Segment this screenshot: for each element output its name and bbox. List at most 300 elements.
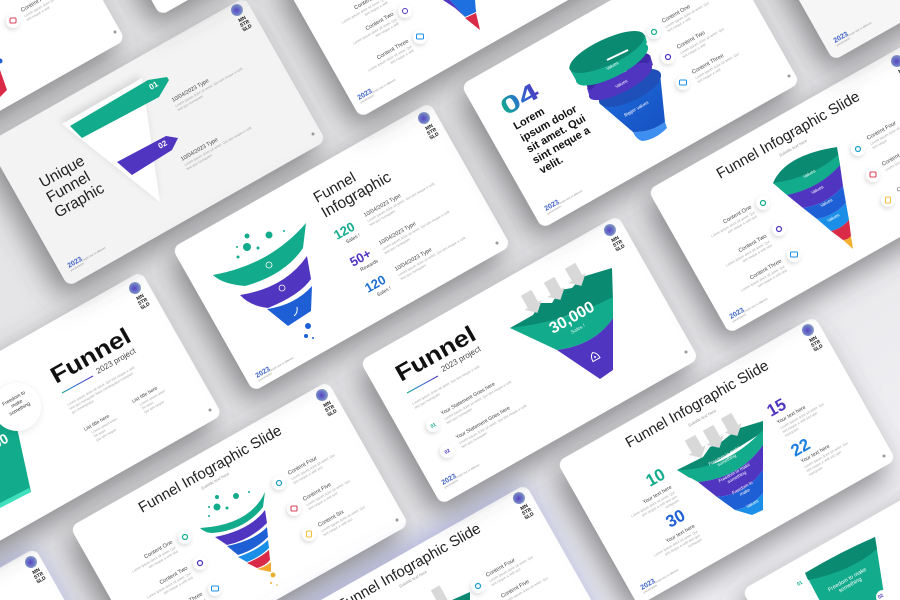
content three: Lorem ipsum dolor sit amet. Qui bbox=[694, 52, 740, 80]
year footer bbox=[729, 294, 770, 323]
type text 1: 10/04/2023 Type bbox=[363, 193, 402, 219]
type text 1: sed quo numquam bbox=[369, 209, 396, 227]
content three text: Content Three bbox=[376, 39, 410, 61]
stat 50+ bbox=[347, 244, 380, 276]
logo: SLD bbox=[327, 408, 339, 418]
statement one: Your Statement Goes here bbox=[440, 381, 496, 417]
teal funnel: Freedom to make bbox=[827, 567, 868, 593]
bold statement: velit. bbox=[538, 154, 565, 177]
stat 50+: Rewards bbox=[359, 258, 380, 273]
type text 2: sed quo numquam bbox=[186, 153, 213, 171]
content two bbox=[722, 222, 786, 271]
logo: SLD bbox=[615, 243, 627, 253]
year footer: 2023 bbox=[729, 307, 746, 321]
panel: top centre slide bbox=[279, 0, 618, 118]
logo: STR bbox=[137, 297, 149, 307]
content two: sint neque a velit sed bbox=[163, 576, 194, 595]
teal funnel bbox=[805, 537, 888, 600]
3D funnel: purple ring bbox=[582, 46, 657, 107]
content three: Content Three bbox=[691, 53, 725, 76]
logo: MN bbox=[520, 503, 530, 512]
logo: STR bbox=[810, 339, 822, 349]
year footer: presentation bbox=[546, 204, 562, 215]
label 01: 01 bbox=[796, 580, 804, 588]
list two bbox=[131, 382, 171, 417]
bold statement: ipsum dolor bbox=[519, 103, 580, 145]
content four: sint neque a velit sed bbox=[491, 567, 521, 587]
logo bbox=[800, 322, 825, 354]
type text 2: sed quo numquam bbox=[384, 237, 411, 255]
page number dot bbox=[312, 132, 314, 136]
heading Funnel: Funnel bbox=[391, 320, 480, 386]
content one: Lorem ipsum dolor sit amet. Qui bbox=[131, 546, 177, 574]
stat 120 teal: 120 bbox=[331, 219, 357, 243]
list two: Qui sint neque bbox=[143, 400, 165, 414]
content one bbox=[647, 0, 712, 39]
subtitle: Subtitle text here bbox=[200, 471, 230, 491]
year footer: presentation bbox=[642, 583, 658, 594]
logo bbox=[23, 554, 48, 586]
logo: MN bbox=[32, 567, 42, 576]
funnel fragment bbox=[443, 0, 480, 30]
stat 10: numquam bbox=[664, 498, 680, 510]
page number dot bbox=[788, 74, 790, 78]
slide card bbox=[70, 381, 409, 600]
content three bbox=[737, 248, 801, 296]
content three bbox=[676, 46, 742, 90]
white triangle bbox=[62, 78, 160, 202]
logo: SLD bbox=[242, 23, 254, 33]
content six: Lorem ipsum dolor sit amet. Qui bbox=[320, 505, 366, 533]
stat 15: 15 bbox=[764, 395, 789, 420]
gradient rule bbox=[62, 376, 93, 393]
slide card bbox=[557, 316, 896, 600]
logo: STR bbox=[239, 19, 251, 29]
3D funnel: teal ring bbox=[564, 23, 654, 94]
funnel fragment bbox=[452, 592, 470, 600]
year footer: 2023 bbox=[441, 473, 458, 487]
stat 120 teal: Sales ! bbox=[345, 233, 361, 245]
logo bbox=[229, 2, 254, 34]
bold statement: sit amet. Qui bbox=[525, 113, 588, 156]
year footer: Simple text to different bbox=[557, 189, 584, 206]
list two: Sit amet bbox=[141, 401, 154, 411]
funnel chart: Freedom to make bbox=[718, 462, 751, 484]
slide card bbox=[461, 0, 800, 229]
funnel chart: something bbox=[716, 453, 737, 467]
content five: sint neque a velit sed bbox=[308, 491, 338, 511]
funnel chart: 30,000 bbox=[547, 299, 598, 337]
year footer bbox=[441, 460, 482, 489]
stat 120 teal bbox=[331, 219, 361, 249]
content four: Content Four bbox=[485, 557, 517, 579]
list one: Qui sint neque bbox=[95, 428, 117, 442]
title: Funnel Infographic Slide bbox=[136, 422, 285, 516]
logo: MN bbox=[611, 235, 621, 244]
logo: MN bbox=[323, 400, 333, 409]
statement two: sed quo numquam bbox=[461, 431, 488, 449]
content one bbox=[707, 196, 770, 242]
panel: unique funnel graphic slide bbox=[0, 0, 326, 287]
content two: Lorem ipsum dolor sit amet. Qui bbox=[725, 240, 771, 268]
content two: sint neque a velit bbox=[682, 43, 707, 59]
statement one: 01 bbox=[430, 422, 438, 430]
page number dot bbox=[114, 30, 116, 34]
year footer: Simple text to different bbox=[846, 21, 873, 38]
heading: Infographic bbox=[319, 169, 394, 221]
content four: Content Four bbox=[287, 455, 319, 477]
content three: sint neque a velit sed bbox=[757, 269, 788, 288]
content four: Lorem ipsum dolor sit amet. Qui bbox=[488, 555, 534, 583]
3D funnel: blue cup: Bigger values bbox=[623, 99, 650, 118]
logo: SLD bbox=[36, 575, 48, 585]
purple arrow band 02: 02 bbox=[157, 138, 169, 151]
statement one: Lorem ipsum dolor sit amet. Qui sint neque a velit bbox=[443, 380, 512, 421]
slide card bbox=[0, 0, 326, 287]
gradient rule bbox=[407, 376, 438, 393]
year footer bbox=[640, 565, 681, 594]
content one: sint neque a velit sed bbox=[727, 215, 758, 234]
heading: Graphic bbox=[52, 180, 107, 221]
label 02 bbox=[876, 590, 890, 600]
layered 3D funnel: Values bbox=[810, 184, 825, 195]
content four: sint neque bbox=[872, 139, 888, 150]
stat 120 blue bbox=[362, 272, 392, 302]
logo: MN bbox=[425, 123, 435, 132]
stat 30 bbox=[650, 506, 703, 565]
slide card bbox=[648, 44, 900, 334]
content four bbox=[471, 549, 536, 593]
teal arrow band 01 bbox=[70, 77, 169, 138]
slide card bbox=[742, 444, 900, 600]
content three text: Lorem ipsum dolor sit amet. Qui bbox=[367, 45, 413, 73]
stat 15: Lorem ipsum dolor sit amet. Qui bbox=[779, 402, 825, 430]
content three text: sint neque a velit bbox=[390, 49, 415, 65]
icon: gear bbox=[398, 4, 412, 18]
content two: Lorem ipsum dolor sit amet. Qui bbox=[146, 572, 192, 600]
icon: laptop bbox=[413, 30, 427, 44]
panel: bottom-left slide bbox=[0, 548, 116, 600]
paragraph: qui consequatur bbox=[71, 399, 95, 415]
panel: top slide fragment bbox=[79, 0, 418, 16]
subtitle: Subtitle text here bbox=[687, 408, 717, 428]
stat 30: numquam bbox=[687, 537, 703, 549]
stat 10 bbox=[627, 465, 680, 526]
content two bbox=[143, 556, 207, 600]
gray arrow bbox=[431, 585, 453, 600]
panel: 04 slide bbox=[461, 0, 800, 229]
subheading: 2023 project bbox=[95, 346, 138, 376]
page number dot bbox=[684, 350, 688, 354]
content four: sint neque a velit sed bbox=[293, 465, 323, 485]
subtitle: Subtitle text here bbox=[778, 138, 808, 158]
content four: Lorem ipsum dolor sit amet. Qui bbox=[290, 453, 336, 481]
year footer: 2023 bbox=[833, 31, 850, 45]
type text 2: 10/04/2023 Type bbox=[378, 221, 417, 247]
year footer: Simple text to different bbox=[268, 356, 295, 373]
content two bbox=[661, 21, 727, 64]
statement two: Your Statement Goes here bbox=[455, 405, 511, 441]
type text 3: 10/04/2023 Type bbox=[394, 247, 433, 273]
year footer: presentation bbox=[731, 312, 747, 323]
arrows into funnel bbox=[681, 411, 746, 463]
content two: sint neque a velit sed bbox=[742, 244, 773, 263]
stat 22: numquam bbox=[808, 466, 823, 477]
slide card bbox=[360, 215, 699, 505]
logo: MN bbox=[238, 15, 248, 24]
year footer: presentation bbox=[359, 93, 375, 104]
panel: funnel 30,000 slide bbox=[360, 215, 699, 505]
subtitle: Subtitle text here bbox=[398, 569, 428, 589]
stat 22: sint neque a velit sed quo bbox=[806, 450, 842, 473]
logo: SLD bbox=[813, 343, 825, 353]
type text 1: sed quo numquam bbox=[177, 94, 204, 112]
type text 2: Lorem ipsum dolor sit amet. Qui sint neque a velit bbox=[183, 126, 252, 167]
paragraph: Lorem ipsum dolor sit amet. Qui sint neque a velit bbox=[412, 365, 480, 406]
content two text: sint neque a velit bbox=[375, 22, 400, 38]
statement two: 02 bbox=[444, 448, 452, 456]
stat 22: Your text here bbox=[800, 444, 831, 465]
year footer: 2023 bbox=[357, 88, 374, 102]
logo: STR bbox=[33, 571, 45, 581]
logo bbox=[602, 222, 627, 254]
bold statement bbox=[512, 103, 593, 177]
stat 30: Lorem ipsum dolor sit amet. Qui bbox=[653, 530, 699, 558]
subheading: 2023 project bbox=[440, 344, 483, 374]
3D funnel: purple ring: Values bbox=[614, 78, 629, 89]
year footer bbox=[833, 18, 874, 47]
funnel chart: Freedom to make bbox=[708, 445, 741, 467]
stat 22 bbox=[788, 435, 853, 477]
content four bbox=[851, 120, 900, 156]
stat 10: 10 bbox=[643, 465, 668, 490]
teal arrow band 01: 01 bbox=[148, 79, 160, 92]
type text 1: Lorem ipsum dolor sit amet. Qui sint neque a velit bbox=[174, 67, 243, 108]
list one bbox=[83, 410, 123, 445]
panel: funnel infographic slide bottom centre bbox=[268, 484, 607, 600]
content two: Content Two bbox=[676, 30, 706, 51]
year footer: presentation bbox=[69, 261, 85, 272]
panel: top-left slide bbox=[0, 0, 125, 186]
year footer: presentation bbox=[443, 478, 459, 489]
logo: SLD bbox=[429, 131, 441, 141]
stat 22: 22 bbox=[788, 435, 813, 460]
year footer bbox=[357, 75, 398, 104]
layered 3D funnel: Values bbox=[819, 197, 834, 208]
statement one: sed quo numquam bbox=[446, 407, 473, 425]
title: Funnel Infographic Slide bbox=[714, 88, 863, 182]
list two: Lorem ipsum dolor bbox=[139, 388, 167, 407]
content four bbox=[272, 447, 338, 490]
stat 10: Your text here bbox=[642, 484, 673, 506]
speech bubble bbox=[0, 383, 41, 431]
stat 10: Lorem ipsum dolor sit amet. Qui bbox=[630, 491, 676, 519]
logo: STR bbox=[426, 127, 438, 137]
panel: funnel infographic slide bottom bbox=[70, 381, 409, 600]
stat 15: Your text here bbox=[776, 405, 807, 426]
stat 30: sint neque a velit sed quo bbox=[664, 534, 701, 557]
stat 10: sint neque a velit sed quo bbox=[641, 495, 678, 518]
list one: Lorem ipsum dolor bbox=[91, 416, 119, 435]
page number dot bbox=[496, 242, 498, 244]
year footer: presentation bbox=[257, 371, 273, 382]
icon: monitor bbox=[6, 14, 20, 28]
title: Funnel Infographic Slide bbox=[623, 357, 772, 451]
year footer: presentation bbox=[835, 36, 851, 47]
3D funnel: blue cup bbox=[594, 61, 667, 141]
heading: Funnel bbox=[44, 168, 93, 206]
year footer: Simple text to different bbox=[742, 297, 769, 314]
content one: Lorem ipsum dolor sit amet. Qui bbox=[664, 1, 710, 29]
content five: Content Five bbox=[302, 482, 333, 503]
layered 3D funnel: Values bbox=[826, 212, 841, 223]
big number 04: 04 bbox=[496, 78, 545, 121]
funnel chart: Sales ! bbox=[570, 323, 586, 336]
content four: Content Four bbox=[866, 120, 898, 142]
content two text: Lorem ipsum dolor sit amet. Qui bbox=[352, 18, 398, 46]
logo bbox=[314, 387, 339, 419]
paragraph: sed quo numquam Nam consequatur excepturi bbox=[69, 371, 134, 411]
arrows into funnel bbox=[517, 261, 590, 318]
year footer: 2023 bbox=[640, 578, 657, 592]
stat 120 blue: Sales ! bbox=[376, 286, 392, 298]
teal bubbles bbox=[208, 491, 250, 517]
funnel chart bbox=[510, 268, 613, 379]
purple arrow band 02 bbox=[117, 136, 178, 175]
year footer: Simple text to different bbox=[454, 463, 481, 480]
3D funnel: teal ring: Values bbox=[605, 60, 620, 71]
slide card bbox=[0, 0, 125, 186]
logo: STR bbox=[324, 404, 336, 414]
logo: STR bbox=[612, 239, 624, 249]
type text 1: 10/04/2023 Type bbox=[171, 78, 210, 104]
heading bbox=[37, 152, 107, 221]
stat 30: Your text here bbox=[665, 523, 696, 545]
content four text: sint neque a velit bbox=[26, 6, 51, 22]
page number dot bbox=[396, 518, 398, 522]
year footer: Simple text to different bbox=[653, 568, 680, 585]
content five: Lorem ipsum dolor sit amet. Qui bbox=[305, 479, 351, 507]
year footer: 2023 bbox=[544, 199, 561, 213]
teal funnel: something bbox=[838, 576, 863, 594]
statement one bbox=[426, 374, 515, 432]
year footer: 2023 bbox=[255, 366, 272, 380]
speech bubble: Freedom to bbox=[1, 390, 27, 408]
stat 15: numquam bbox=[784, 427, 799, 438]
type text 2: Lorem ipsum dolor sit amet. Qui sint neque a velit bbox=[381, 210, 450, 251]
logo: SLD bbox=[140, 301, 152, 311]
panel: top-right slide bbox=[752, 0, 900, 61]
stat 15 bbox=[764, 395, 829, 438]
content six: Content Six bbox=[317, 509, 345, 529]
content five: Content Five bbox=[500, 579, 531, 600]
content two: Content Two bbox=[159, 566, 189, 586]
heading: Unique bbox=[37, 152, 88, 191]
slide card bbox=[0, 271, 222, 561]
bold statement: Lorem bbox=[512, 106, 547, 133]
logo: MN bbox=[809, 335, 819, 344]
content one text: sint neque a velit bbox=[364, 1, 389, 17]
heading: Funnel bbox=[311, 169, 359, 206]
teal funnel fragment bbox=[0, 423, 31, 508]
stat 120 blue: 120 bbox=[362, 272, 388, 296]
content five bbox=[866, 147, 900, 182]
content six bbox=[302, 499, 368, 541]
content six: sint neque a velit sed bbox=[323, 517, 353, 537]
statement two: Lorem ipsum dolor sit amet. Qui sint neque a velit bbox=[458, 404, 527, 445]
year footer bbox=[67, 243, 108, 272]
content three text bbox=[364, 38, 415, 76]
funnel chart bbox=[213, 223, 312, 326]
content three: sint neque a velit bbox=[697, 68, 722, 84]
content one bbox=[128, 530, 192, 577]
year footer: 2023 bbox=[67, 256, 84, 270]
slide card bbox=[79, 0, 418, 16]
slide card bbox=[752, 0, 900, 61]
teal bubbles bbox=[236, 230, 285, 258]
logo: MN bbox=[136, 293, 146, 302]
content one: Content One bbox=[722, 205, 753, 225]
panel: funnel infographic slide lower right bbox=[557, 316, 896, 600]
paragraph: sed quo numquam bbox=[414, 392, 441, 410]
page number dot bbox=[882, 454, 886, 458]
speech bubble: something bbox=[8, 401, 32, 418]
logo bbox=[511, 490, 536, 522]
bold statement: sint neque a bbox=[531, 124, 593, 167]
content three bbox=[158, 582, 222, 600]
slide card bbox=[279, 0, 618, 118]
type text 2: 10/04/2023 Type bbox=[180, 137, 219, 163]
list one: List title here bbox=[83, 413, 111, 433]
funnel tip bbox=[0, 58, 7, 97]
content two text bbox=[349, 11, 400, 49]
year footer: Simple text to different bbox=[80, 246, 107, 263]
stat 50+: 50+ bbox=[347, 245, 374, 270]
content three: Content Three bbox=[749, 259, 783, 281]
funnel chart: something bbox=[726, 470, 747, 484]
layered funnel chart bbox=[200, 492, 271, 572]
paragraph: Lorem ipsum dolor sit amet. Qui sint neque a velit bbox=[67, 366, 135, 407]
statement two bbox=[440, 398, 530, 458]
list two: List title here bbox=[131, 385, 159, 405]
panel: funnel 2023 project slide left bbox=[0, 271, 222, 561]
layered 3D funnel bbox=[773, 147, 853, 249]
funnel chart: Freedom to bbox=[731, 480, 754, 496]
slide card bbox=[172, 102, 511, 392]
content one: Content One bbox=[661, 4, 692, 25]
orange dots bbox=[270, 572, 278, 586]
page number dot bbox=[208, 408, 212, 412]
panel: bottom-right slide bbox=[742, 444, 900, 600]
layered 3D funnel: Values bbox=[802, 168, 817, 179]
funnel chart: make bbox=[739, 487, 751, 497]
content one: Lorem ipsum dolor sit amet. Qui bbox=[710, 211, 756, 239]
slide card bbox=[0, 548, 116, 600]
year footer bbox=[544, 186, 585, 215]
list one: Sit amet bbox=[93, 429, 106, 439]
content two text: Content Two bbox=[365, 12, 395, 32]
logo: SLD bbox=[524, 511, 536, 521]
funnel chart: Values bbox=[745, 498, 760, 509]
logo: STR bbox=[521, 507, 533, 517]
panel: funnel infographic slide right bbox=[648, 44, 900, 334]
logo bbox=[889, 53, 900, 85]
logo bbox=[127, 280, 152, 312]
stat 22: Lorem ipsum dolor sit amet. Qui bbox=[803, 441, 849, 469]
stat 15: sint neque a velit sed quo bbox=[782, 411, 818, 434]
content two: Lorem ipsum dolor sit amet. Qui bbox=[679, 27, 725, 55]
funnel chart bbox=[677, 421, 763, 515]
